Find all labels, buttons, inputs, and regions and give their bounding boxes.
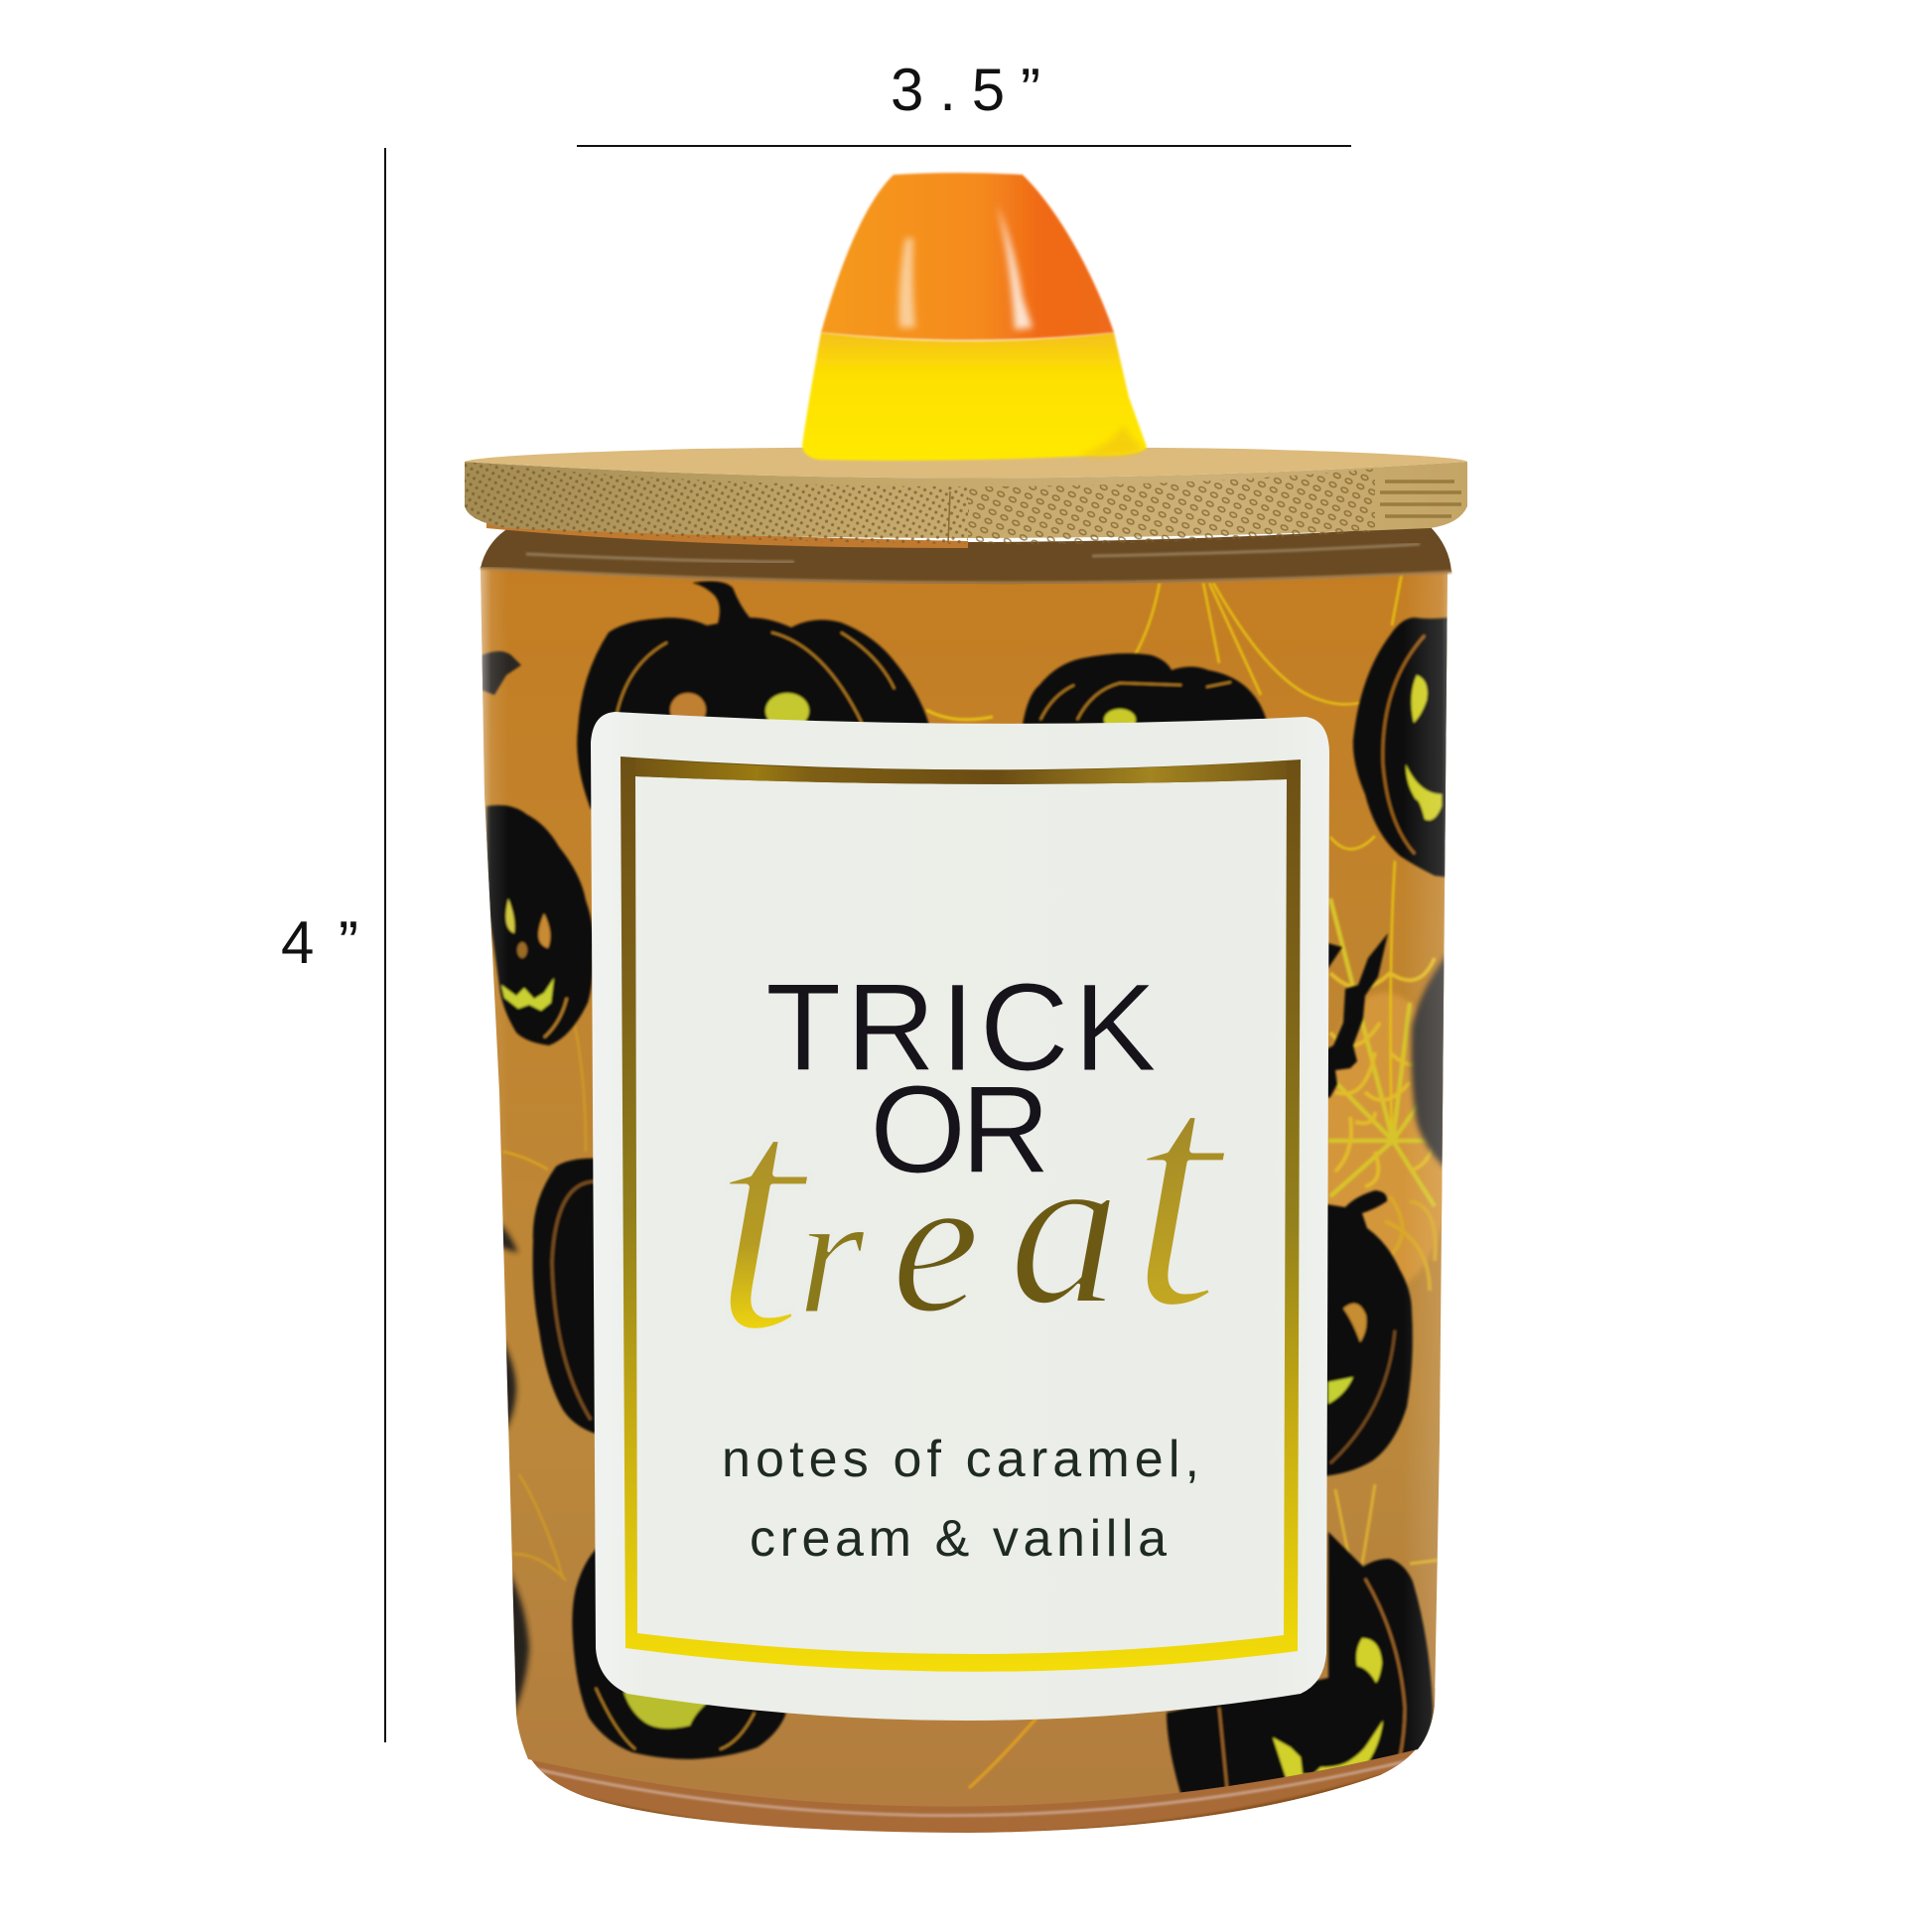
gold foil frame (621, 757, 1301, 1672)
product label (591, 712, 1329, 1721)
orange candy tip (821, 173, 1114, 340)
pumpkins (486, 581, 1459, 1803)
label paper (591, 712, 1329, 1721)
lid side with bamboo texture (465, 462, 1467, 538)
yellow candy base (802, 333, 1147, 461)
pumpkin: bottom right (1167, 1532, 1433, 1803)
spider webs (503, 573, 1449, 1788)
candle jar (477, 556, 1459, 1847)
jar base rim (515, 1688, 1436, 1833)
pumpkin: left middle (533, 1159, 606, 1437)
script word: treat: a (1009, 1103, 1120, 1351)
script word: treat: e (892, 1135, 980, 1354)
dimension line: width (577, 145, 1351, 147)
candy base marbling (1077, 425, 1144, 457)
pumpkin: top right (1353, 616, 1459, 879)
wood lid and rim (465, 447, 1467, 584)
warm glow behind web (1328, 993, 1444, 1283)
scent notes line 2: cream & vanilla (750, 1510, 1167, 1568)
scent notes line 1: notes of caramel, (722, 1431, 1199, 1488)
pumpkin: top left (577, 581, 929, 809)
pumpkin: left edge slivers (502, 1220, 534, 1716)
pumpkin: top middle (1023, 653, 1268, 731)
printed jar wrap (477, 556, 1459, 1847)
bat: top left (482, 651, 521, 695)
lid top surface (465, 447, 1467, 479)
candy highlights (899, 204, 1033, 330)
dimension label: height 4 inches: 4” (281, 909, 358, 976)
jar edge highlights (477, 556, 1459, 1847)
candy corn topper (802, 173, 1147, 461)
pumpkin: right middle (1320, 1190, 1413, 1476)
bat: right (1320, 933, 1388, 1100)
heading: TRICK: TRICK (765, 959, 1157, 1097)
dimension label: width 3.5 inches: 3.5” (891, 57, 1040, 123)
frame top foil sheen (635, 759, 1287, 784)
dark glass rim (481, 526, 1451, 584)
pumpkin: left (486, 805, 594, 1045)
pumpkin: bottom left (572, 1541, 786, 1759)
script word: treat: t (1128, 1004, 1233, 1378)
dimension line: height (384, 148, 386, 1742)
heading: OR: OR (870, 1061, 1050, 1199)
script word: treat: t (711, 1028, 816, 1402)
lid underside (486, 520, 968, 548)
script word: treat: r (797, 1158, 866, 1350)
pumpkin: right edge (1407, 952, 1444, 1171)
